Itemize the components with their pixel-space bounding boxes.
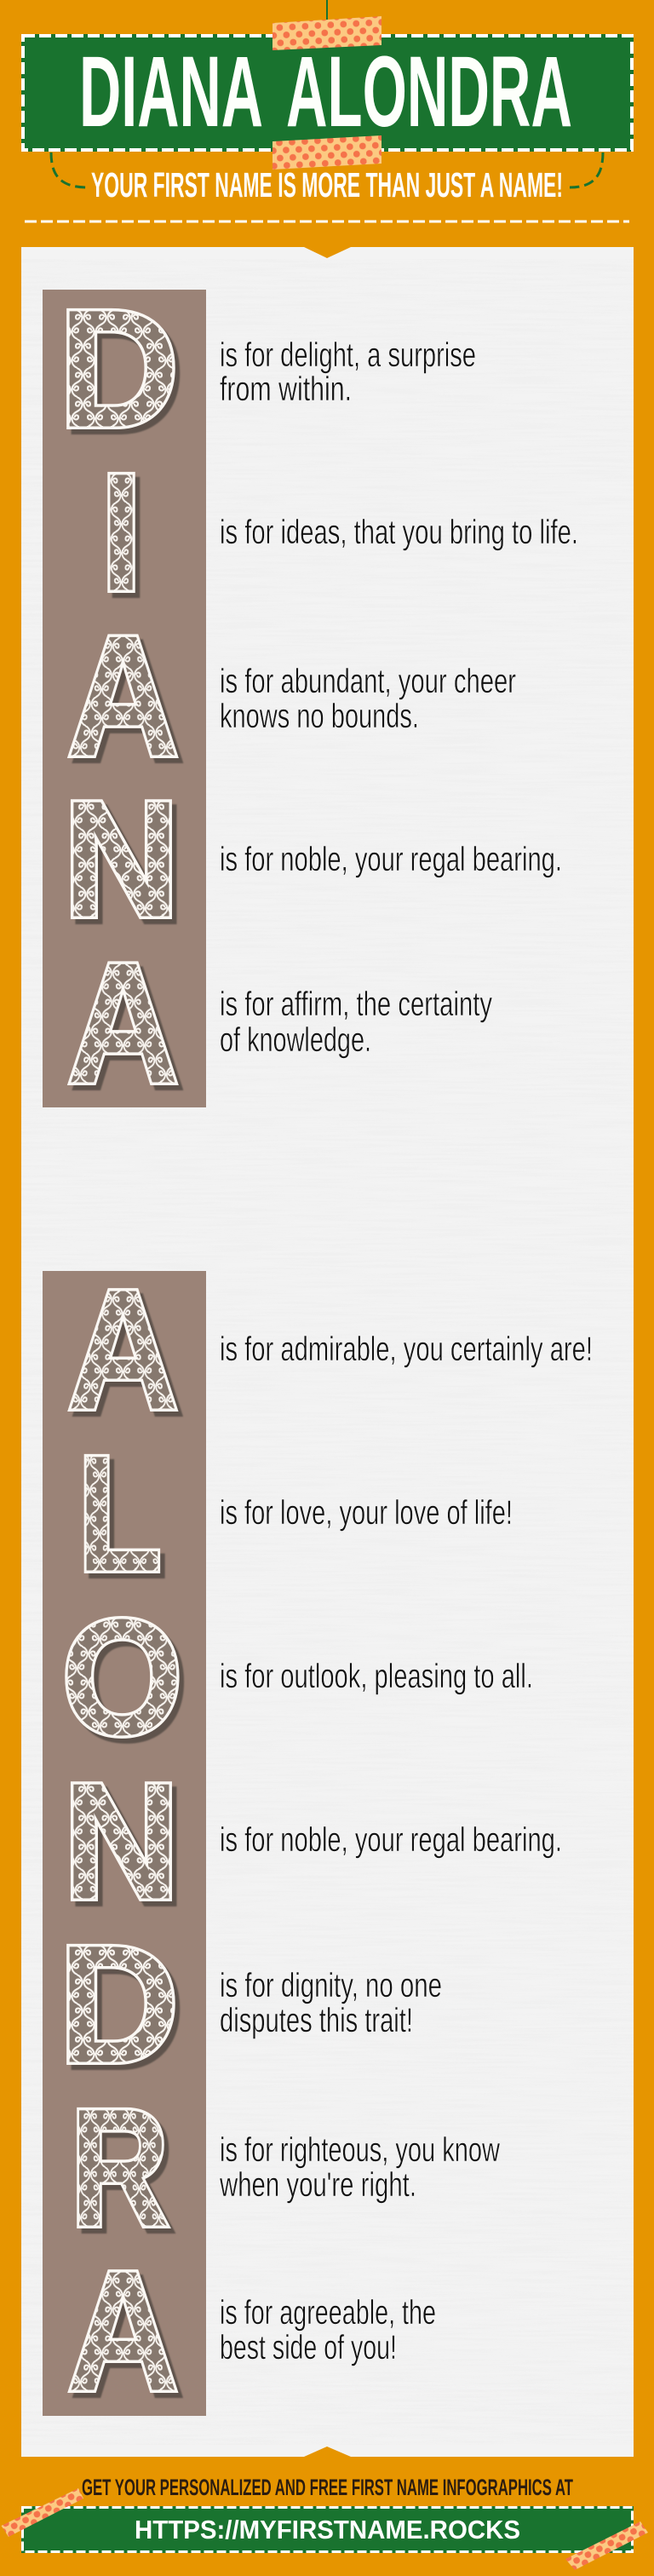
meaning A: knows no bounds. — [220, 698, 419, 735]
footer tape right — [565, 2521, 648, 2570]
letter N: N — [68, 1755, 184, 1938]
letter A: A — [68, 2237, 178, 2426]
footer banner — [21, 2506, 634, 2553]
letter D: D — [59, 1912, 179, 2097]
meaning A: is for abundant, your cheer — [220, 663, 516, 700]
letter O: O — [62, 1585, 182, 1768]
text: ALONDRA meanings — [219, 1331, 593, 2366]
letter N: N — [63, 1750, 180, 1933]
text: DIANA meanings — [220, 336, 578, 1059]
letter A: A — [68, 2237, 178, 2426]
footer tape left — [2, 2488, 83, 2537]
letter A: A — [68, 1256, 178, 1445]
meaning A — [220, 986, 492, 1059]
meaning A: of knowledge. — [220, 1021, 371, 1059]
letter D: D — [59, 1912, 179, 2097]
letter D: D — [64, 281, 183, 467]
title — [79, 36, 572, 148]
meaning D: disputes this trait! — [220, 2002, 413, 2039]
meaning A: is for affirm, the certainty — [220, 986, 492, 1023]
string above title banner — [326, 0, 328, 22]
meaning O: is for outlook, pleasing to all. — [220, 1658, 533, 1695]
letter N: N — [63, 1750, 180, 1933]
letter I: I — [106, 445, 146, 630]
letter D: D — [59, 276, 179, 462]
meaning D: from within. — [220, 371, 352, 408]
meaning D — [220, 336, 476, 408]
top tape lower — [272, 135, 382, 170]
letter A: A — [72, 607, 183, 796]
letter O: O — [62, 1585, 182, 1768]
meaning D — [220, 1967, 442, 2039]
letter R: R — [71, 2075, 169, 2261]
meaning D: is for delight, a surprise — [220, 336, 476, 374]
letter N: N — [63, 768, 180, 951]
letter O: O — [66, 1590, 187, 1774]
header — [21, 0, 634, 204]
meaning R: is for righteous, you know — [220, 2131, 500, 2169]
footer — [2, 2475, 648, 2570]
letter A: A — [68, 601, 178, 791]
letter A: A — [68, 601, 178, 791]
letter L: L — [77, 1422, 162, 1605]
letter A: A — [68, 1256, 178, 1445]
letter L: L — [77, 1422, 162, 1605]
meaning A: best side of you! — [220, 2329, 397, 2366]
meaning A — [220, 2294, 436, 2366]
letter R: R — [75, 2080, 174, 2266]
panel: ALONDRA letter column — [43, 1256, 206, 2431]
letter N: N — [68, 773, 184, 956]
letter R: R — [71, 2075, 169, 2261]
letter N: N — [63, 768, 180, 951]
meaning A — [220, 663, 516, 735]
letter D: D — [59, 276, 179, 462]
letter A: A — [72, 1261, 183, 1450]
top tape upper — [272, 16, 382, 50]
meaning L: is for love, your love of life! — [220, 1494, 513, 1532]
right dashed curve — [570, 152, 603, 187]
left dashed curve — [51, 152, 88, 187]
meaning D: is for dignity, no one — [220, 1967, 442, 2004]
meaning R: when you're right. — [219, 2166, 416, 2204]
letter A: A — [68, 929, 178, 1118]
letter A: A — [68, 929, 178, 1118]
letter L: L — [83, 1427, 166, 1610]
title: DIANA — [79, 36, 263, 148]
letter A: A — [72, 934, 183, 1124]
meaning A: is for agreeable, the — [220, 2294, 436, 2332]
letter D: D — [64, 1917, 183, 2102]
letter A: A — [72, 2242, 183, 2431]
letter I: I — [100, 440, 142, 625]
footer URL: HTTPS://MYFIRSTNAME.ROCKS — [135, 2515, 520, 2544]
letter I: I — [100, 440, 142, 625]
panel: DIANA letter column — [43, 276, 206, 1124]
meaning R — [219, 2131, 500, 2204]
title banner — [21, 34, 634, 152]
